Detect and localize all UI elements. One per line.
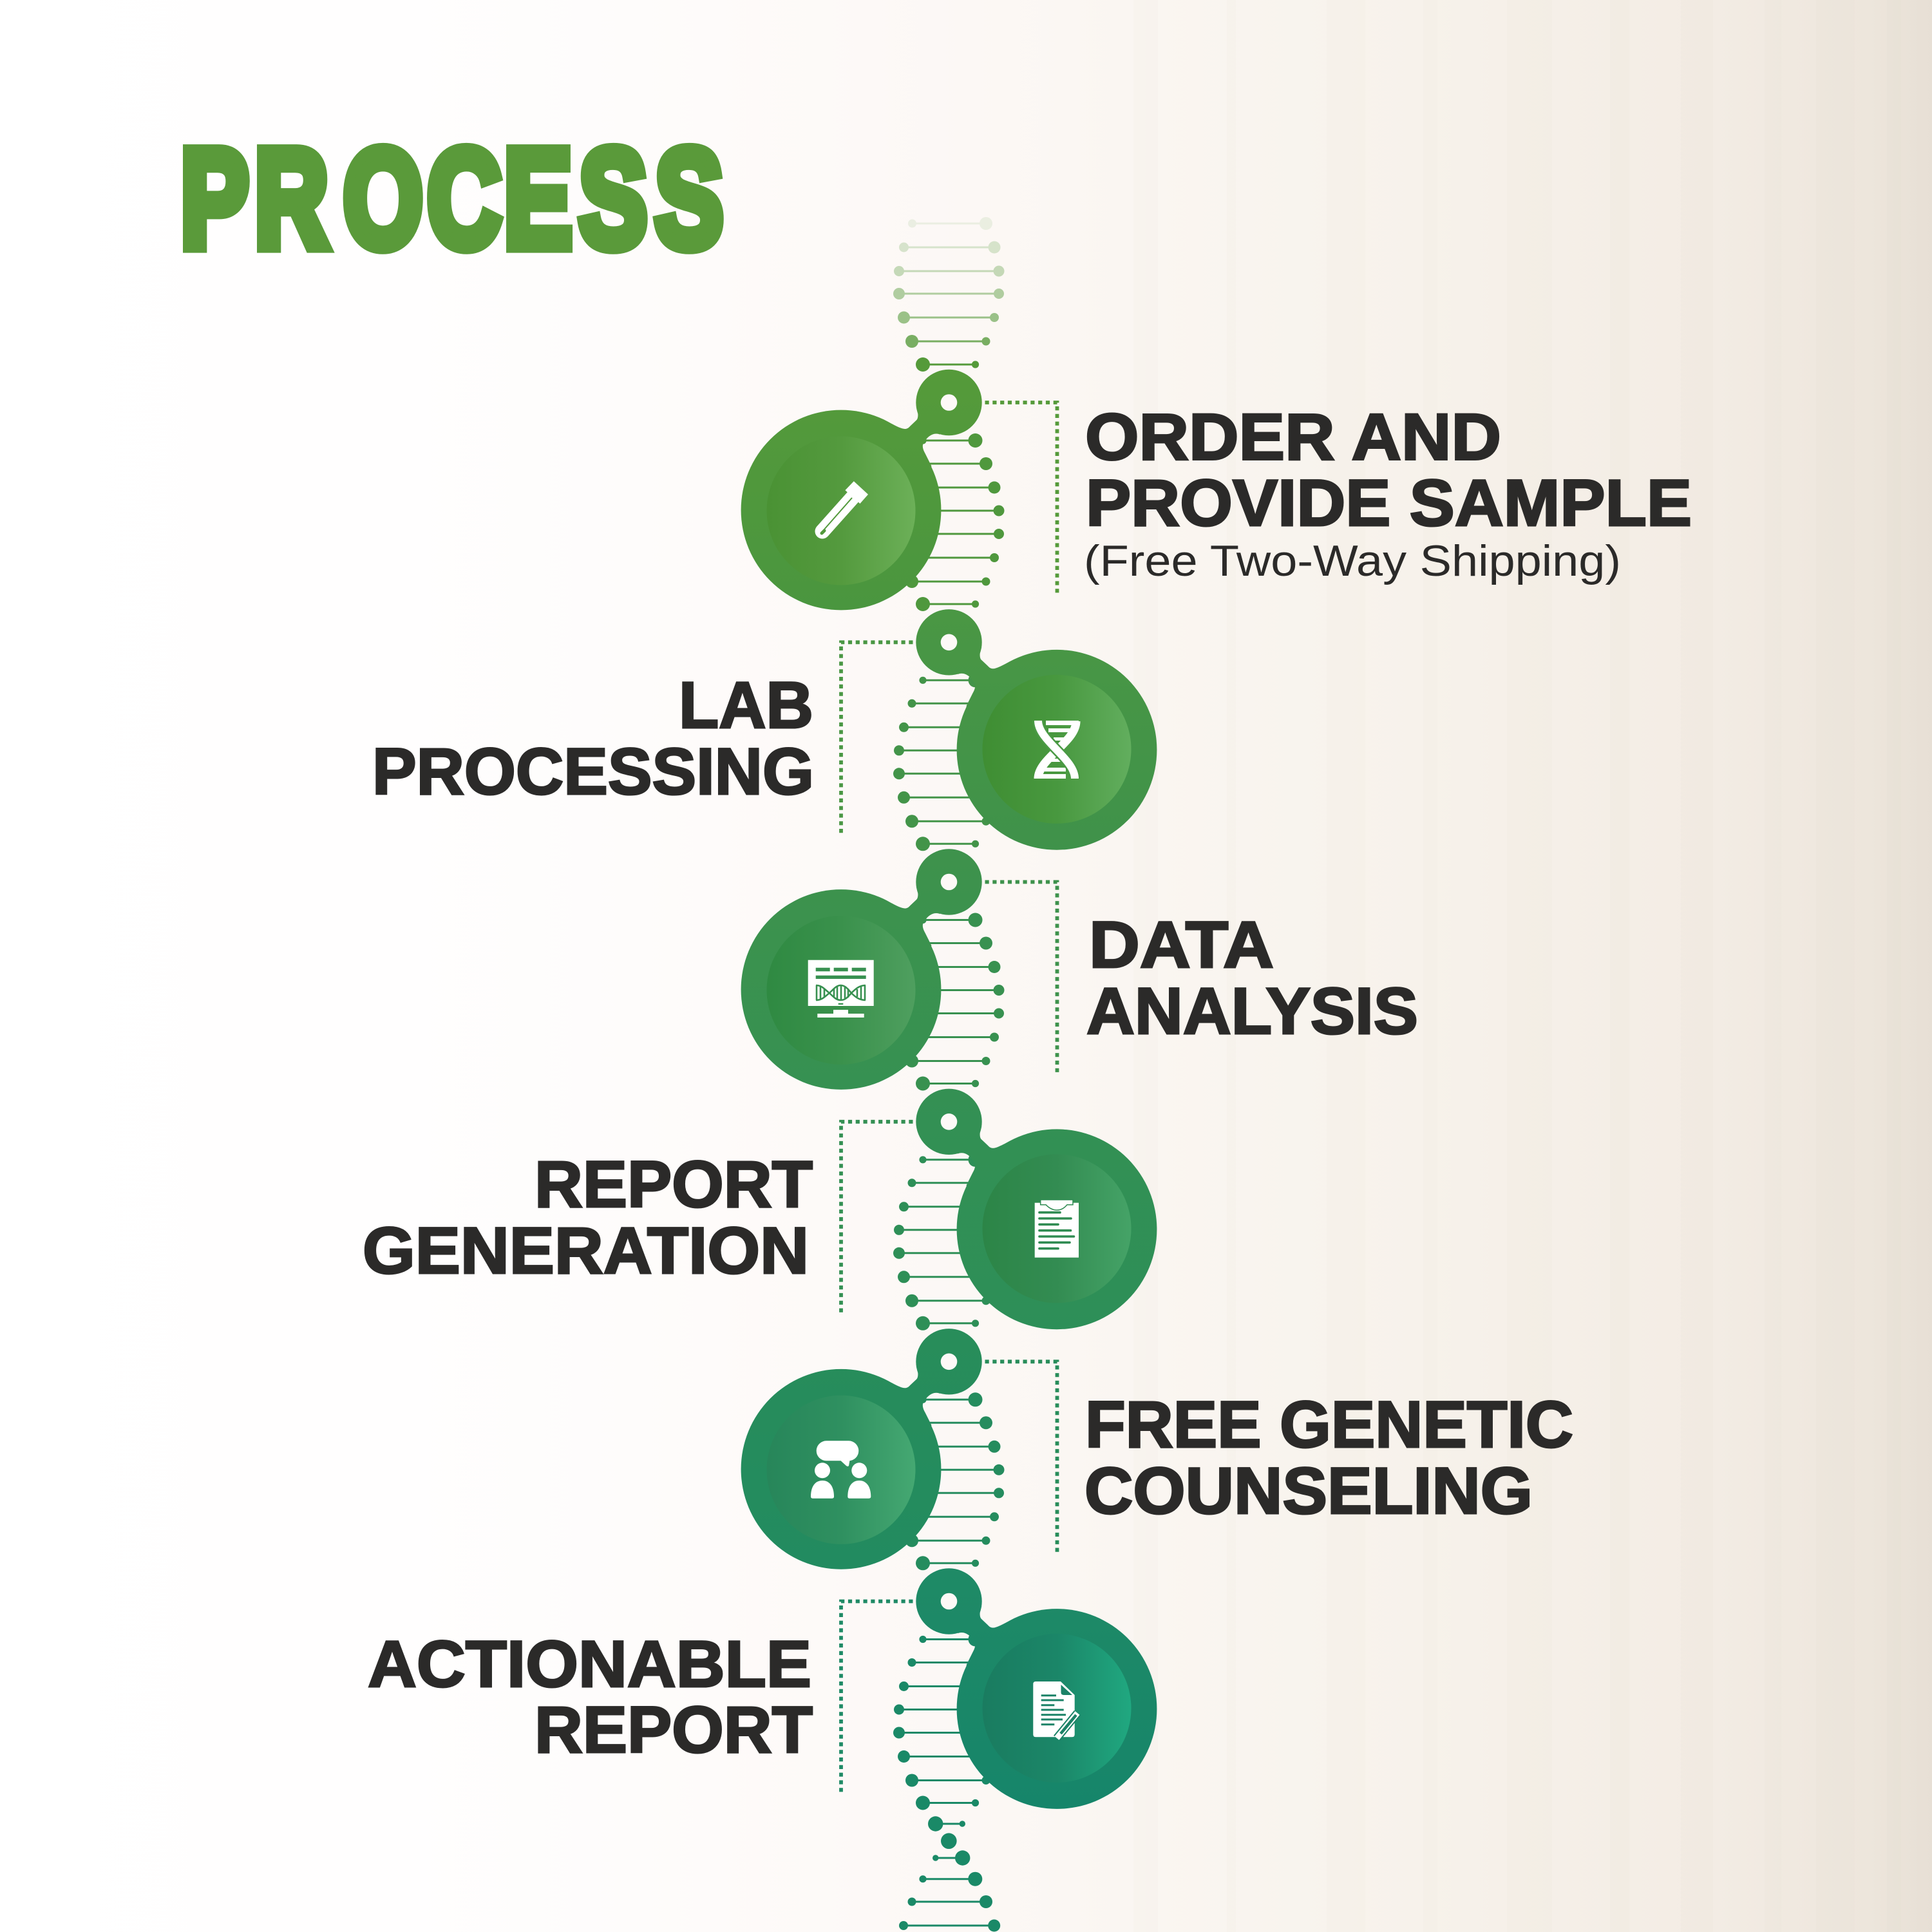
label: FREE GENETIC — [1085, 1388, 1573, 1461]
DNA helix rungs: step 5 — [893, 1392, 1005, 1570]
icon: document with pen — [1033, 1681, 1077, 1738]
DNA helix strand: bottom — [899, 1816, 1000, 1932]
label — [1084, 401, 1692, 585]
title: PROCESS — [181, 122, 723, 277]
dotted connector — [841, 1122, 913, 1314]
dotted connector — [985, 1361, 1057, 1555]
node circle — [916, 609, 1157, 850]
icon: clipboard — [1035, 1200, 1079, 1258]
label: ORDER AND — [1085, 401, 1501, 474]
label — [368, 1627, 813, 1766]
panel: step 6 actionable report — [368, 1568, 1157, 1809]
panel: step 1 order and provide sample — [741, 370, 1692, 610]
label: REPORT — [535, 1148, 813, 1221]
panel: step 5 free genetic counseling — [741, 1329, 1573, 1569]
icon: counseling people — [811, 1441, 871, 1499]
node circle — [741, 370, 982, 610]
label: GENERATION — [363, 1214, 809, 1287]
icon: DNA — [1035, 721, 1079, 779]
panel: step 3 data analysis — [741, 849, 1418, 1090]
node circle — [916, 1089, 1157, 1329]
label: (Free Two-Way Shipping) — [1084, 536, 1621, 585]
label: COUNSELING — [1084, 1454, 1533, 1528]
dotted connector — [985, 882, 1057, 1075]
node circle — [741, 849, 982, 1090]
dotted connector — [985, 402, 1057, 596]
DNA helix rungs: step 3 — [893, 913, 1005, 1091]
DNA helix rungs: step 6 — [893, 1632, 1005, 1810]
dotted connector — [841, 1601, 913, 1794]
label: LAB — [679, 668, 813, 742]
DNA helix rungs: step 1 — [893, 433, 1005, 611]
node circle — [916, 1568, 1157, 1809]
icon: test tube — [822, 481, 868, 533]
panel: step 4 report generation — [363, 1089, 1157, 1329]
label — [372, 668, 814, 808]
panel: step 2 lab processing — [372, 609, 1157, 850]
label — [1086, 908, 1418, 1048]
node circle — [741, 1329, 982, 1569]
icon: monitor with DNA — [808, 960, 874, 1018]
DNA helix rungs: step 4 — [893, 1153, 1005, 1331]
label: PROVIDE SAMPLE — [1086, 466, 1692, 540]
label: ANALYSIS — [1086, 974, 1418, 1048]
label: DATA — [1089, 908, 1274, 981]
dotted connector — [841, 642, 913, 834]
label — [363, 1148, 813, 1287]
DNA helix rungs: step 2 — [893, 673, 1005, 851]
label: REPORT — [535, 1693, 813, 1766]
label: PROCESSING — [372, 735, 814, 808]
label — [1084, 1388, 1573, 1528]
label: ACTIONABLE — [368, 1627, 811, 1701]
DNA helix strand: fading top — [893, 217, 1005, 372]
